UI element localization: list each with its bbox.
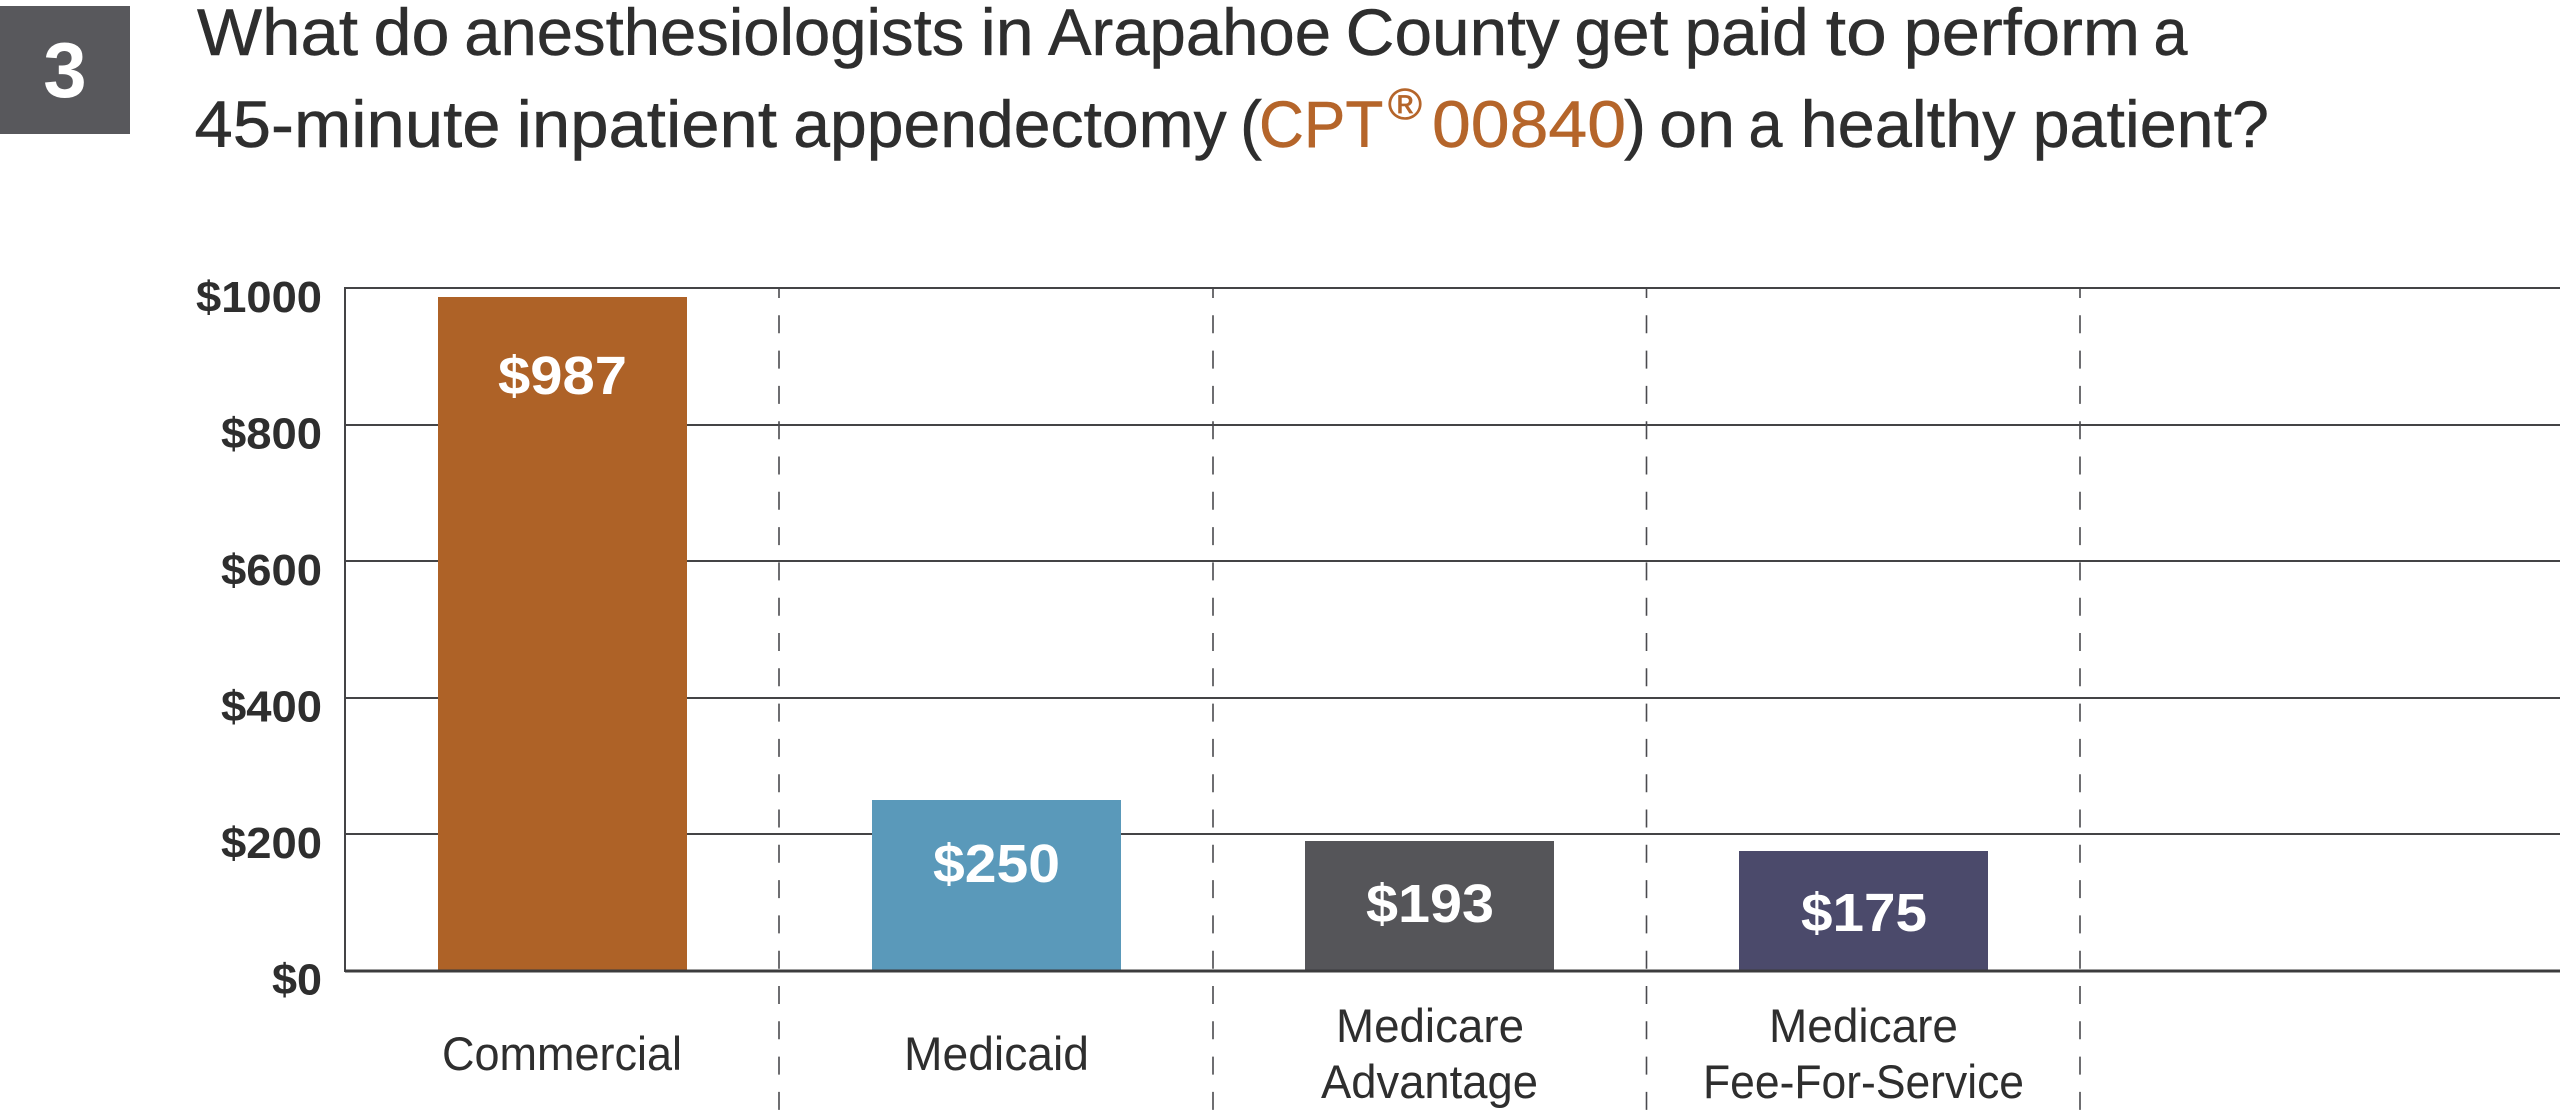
category labels: Commercial	[442, 1027, 682, 1080]
bar: Commercial $987	[438, 297, 687, 971]
bar: Medicare Advantage $193	[1305, 841, 1554, 971]
title	[194, 0, 2269, 161]
number badge: 3	[43, 26, 87, 114]
title: inpatient	[517, 87, 777, 161]
bar: Medicare Fee-For-Service $175: $175	[1801, 883, 1927, 943]
category labels: Fee-For-Service	[1703, 1055, 2024, 1108]
y axis gridlines	[345, 287, 2560, 972]
bar: Medicaid $250	[872, 800, 1121, 971]
y axis labels: $600	[221, 546, 322, 595]
bar: Commercial $987: $987	[498, 346, 627, 406]
y axis labels: $1000	[196, 273, 322, 322]
baseline	[345, 970, 2560, 972]
bar: Medicare Advantage $193: $193	[1366, 874, 1494, 934]
category labels: Medicare	[1336, 999, 1524, 1052]
title: )	[1624, 87, 1646, 161]
title: on	[1659, 87, 1735, 161]
bar: Medicaid $250: $250	[933, 834, 1060, 894]
bar: Medicare Fee-For-Service $175	[1739, 851, 1988, 971]
category labels: Advantage	[1321, 1055, 1538, 1108]
y axis labels: $0	[272, 956, 322, 1004]
y axis labels: $400	[221, 682, 322, 732]
title: (	[1240, 87, 1262, 161]
category dividers	[779, 289, 2080, 1113]
title: 00840	[1432, 87, 1626, 161]
number badge	[0, 6, 130, 134]
title: appendectomy	[793, 87, 1227, 161]
category labels	[442, 999, 2024, 1108]
title: ®	[1388, 80, 1422, 129]
title: patient?	[2033, 87, 2269, 161]
title: a	[1748, 87, 1783, 161]
title: 45-minute	[194, 87, 500, 161]
y axis labels: $800	[221, 410, 322, 458]
y axis labels	[196, 273, 322, 1004]
category labels: Medicaid	[904, 1027, 1089, 1080]
title: healthy	[1801, 87, 2016, 161]
category labels: Medicare	[1769, 999, 1958, 1052]
bar chart	[196, 273, 2560, 1113]
title: CPT	[1259, 87, 1383, 161]
y axis labels: $200	[221, 819, 322, 868]
